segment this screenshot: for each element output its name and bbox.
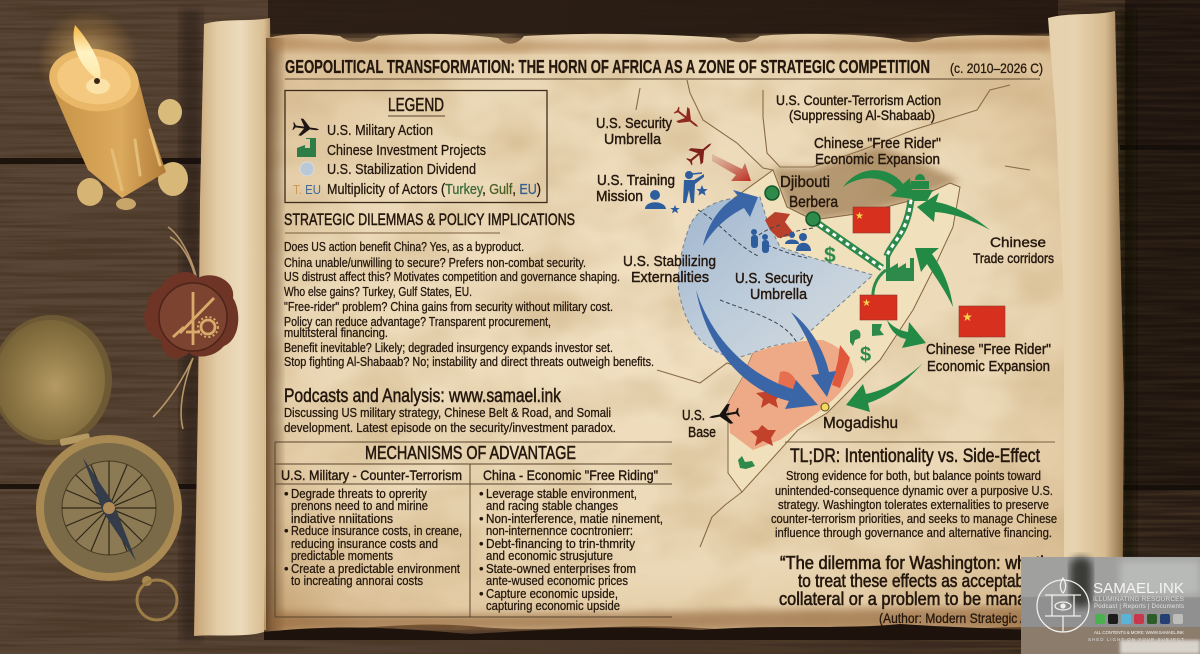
watermark slogan: SHED LIGHT ON YOUR SUBJECT [1088, 637, 1184, 642]
column: China [479, 467, 663, 613]
text block: podcasts: Podcasts and Analysis: www.samael.ink [284, 386, 561, 407]
arrow: green to port [843, 170, 913, 199]
map labels: Externalities [631, 269, 709, 286]
watermark platform icons [1095, 614, 1183, 624]
watermark logo [1037, 578, 1089, 632]
icon: flag of China [853, 207, 890, 233]
icon: port Berbera [806, 212, 820, 226]
icon: flag of China: ★ [855, 211, 864, 222]
column: U.S. military: Degrade threats to oprerity [291, 486, 427, 501]
map labels: U.S. Training [597, 172, 675, 189]
map labels: Economic Expansion [927, 358, 1050, 375]
map: surrounding coastlines [636, 80, 1030, 547]
heading: strategic dilemmas: STRATEGIC DILEMMAS & POLICY IMPLICATIONS [284, 210, 575, 229]
main parchment sheet [264, 34, 1070, 640]
icon: flag of China: ★ [962, 310, 973, 324]
column: China: Capture economic upside, [486, 586, 618, 601]
column: U.S. military: Create a predictable environment [291, 561, 460, 576]
text block: TL;DR [771, 442, 1057, 540]
arrow: blue to Mogadishu [696, 290, 818, 409]
column: China: Debt-financing to trin-thmrity [486, 536, 635, 551]
map labels [596, 92, 1054, 441]
map: southern conflict zone [728, 340, 853, 450]
legend label: Multiplicity of Actors (Turkey, Gulf, EU) [327, 181, 541, 198]
map: conflict markers [750, 212, 850, 446]
watermark tagline: ILLUMINATING RESOURCES [1093, 596, 1185, 603]
icon: training soldier [645, 171, 708, 213]
map labels: (Suppressing Al-Shabaab) [789, 107, 935, 123]
watermark wordmark: SAMAEL.INK [1093, 581, 1184, 597]
map labels: Chinese "Free Rider" [926, 341, 1051, 358]
column: China: • [479, 561, 484, 576]
icon: stabilization circle [300, 162, 314, 176]
icon: factory [886, 255, 914, 281]
icon: flag of China: ★ [862, 298, 871, 309]
column: China: • [479, 586, 484, 601]
text block: dilemmas list: US distrust affect this? Motivates competition and governance shaping. [284, 270, 620, 284]
panel: mechanisms of advantage table [275, 442, 672, 617]
icon: Mogadishu marker [821, 403, 829, 411]
quote: collateral or a problem to be managed” [779, 589, 1059, 609]
map labels: Berbera [789, 194, 838, 211]
map: Horn of Africa [636, 80, 1030, 547]
map labels: Umbrella [604, 131, 662, 148]
table heading: MECHANISMS OF ADVANTAGE [365, 443, 576, 463]
icon: actors initials: T. EU [293, 182, 321, 197]
column: China: non-internennce cocntronierr: [486, 523, 633, 538]
column: U.S. military: • [284, 523, 289, 538]
icon: candle [38, 10, 188, 210]
text block: dilemmas list: Does US action benefit China? Yes, as a byproduct. [284, 240, 524, 254]
map labels: U.S. Security [735, 270, 813, 287]
legend label: Chinese Investment Projects [327, 142, 486, 159]
quote: “The dilemma for Washington: whether [780, 553, 1064, 573]
map labels: Djibouti [780, 174, 830, 191]
text block: podcasts: Discussing US military strategy, Chinese Belt & Road, and Somali [284, 405, 611, 420]
map: dashed movement arrows [698, 210, 813, 343]
column: U.S. military: • [284, 486, 289, 501]
right scroll roll [1048, 11, 1124, 654]
legend heading: LEGEND [388, 95, 444, 115]
column: U.S. military: predictable moments [291, 548, 393, 563]
column: U.S. military: prenons need to and mirine [291, 498, 428, 513]
column: China: China - Economic "Free Riding" [483, 467, 658, 483]
quote [779, 553, 1069, 626]
column: U.S. military [281, 467, 462, 588]
column: China: • [479, 511, 484, 526]
text block: dilemmas list: "Free-rider" problem? China gains from security without military cost. [284, 300, 613, 314]
map labels: Chinese [990, 234, 1046, 250]
map: U.S. security umbrella region [678, 197, 873, 358]
map: Somalia landmass [690, 170, 960, 492]
map labels: Umbrella [750, 286, 808, 303]
column: China: ante-wused economic prices [486, 573, 628, 588]
icon: wax seal with twine [144, 227, 238, 429]
text block: dilemmas list: China unable/unwilling to secure? Prefers non-combat security. [284, 256, 586, 270]
map labels: U.S. Security [596, 115, 672, 132]
icon: dollar: $ [824, 244, 836, 267]
arrow: green from flag [915, 248, 953, 307]
legend label: U.S. Military Action [327, 122, 433, 139]
text block: dilemmas list: Policy can reduce advantage? Transparent procurement, [284, 315, 551, 329]
map labels: U.S. Counter-Terrorism Action [776, 92, 941, 108]
column: China: State-owned enterprises from [486, 561, 636, 576]
left scroll roll [194, 18, 272, 636]
map labels: Mission [596, 188, 643, 205]
text block: TL;DR: strategy. Washington tolerates externalities to preserve [778, 497, 1049, 512]
text block: TL;DR: counter-terrorism priorities, and seeks to manage Chinese [771, 511, 1057, 526]
column: China: Leverage stable environment, [486, 486, 637, 501]
icon: factory [297, 138, 316, 157]
icon: blue people [751, 229, 811, 253]
map labels: U.S. [682, 407, 705, 424]
text block: podcasts [284, 386, 616, 435]
column: China: and racing stable changes [486, 498, 618, 513]
column: U.S. military: • [284, 561, 289, 576]
column: China: • [479, 536, 484, 551]
text block: podcasts: development. Latest episode on the security/investment paradox. [284, 420, 616, 435]
arrow: blue from umbrella to Mogadishu [791, 312, 836, 397]
watermark services: Podcast | Reports | Documents [1094, 604, 1184, 610]
icon: jet [292, 118, 320, 138]
arrow: blue to Djibouti [703, 190, 758, 246]
map labels: Trade corridors [973, 250, 1054, 266]
column: China: capturing economic upside [486, 598, 620, 613]
panel: legend [285, 90, 547, 202]
map labels: Chinese "Free Rider" [814, 135, 941, 152]
map: gulf shading [773, 146, 960, 222]
icon: red jet [683, 136, 718, 169]
map labels: Mogadishu [823, 415, 898, 432]
icon: flag of China [860, 295, 897, 320]
icon: red jet [671, 103, 704, 134]
column: U.S. military: U.S. Military - Counter-Terrorism [281, 467, 462, 483]
text block: dilemmas list: Stop fighting Al-Shabaab? No; instability and direct threats outweigh benefits. [284, 355, 654, 369]
icon: open compass lid [0, 315, 112, 446]
title: GEOPOLITICAL TRANSFORMATION: THE HORN OF AFRICA AS A ZONE OF STRATEGIC COMPETITION [285, 57, 930, 77]
arrow: green to Mogadishu [846, 363, 923, 412]
column: China: Non-interference, matie ninement, [486, 511, 663, 526]
column: China: and economic strusjuture [486, 548, 613, 563]
icon: green investment blobs [738, 324, 884, 469]
arrow: green trade corridor [917, 193, 990, 230]
text block: TL;DR: influence through governance and alternative financing. [775, 525, 1052, 540]
arrow: red strike [712, 154, 751, 181]
watermark panel: SAMAEL.INK [1021, 557, 1200, 654]
title: (c. 2010–2026 C) [950, 60, 1043, 76]
icon: port Djibouti [765, 186, 779, 200]
text block: TL;DR: TL;DR: Intentionality vs. Side-Effect [790, 446, 1041, 467]
text block: TL;DR: Strong evidence for both, but balance points toward [786, 468, 1041, 483]
icon: compass [36, 435, 182, 620]
quote: to treat these effects as acceptable [798, 571, 1036, 591]
map labels: Economic Expansion [815, 151, 940, 168]
legend label: U.S. Stabilization Dividend [327, 161, 476, 178]
column: U.S. military: reducing insurance costs and [291, 536, 438, 551]
icon: flag of China [959, 306, 1005, 337]
icon: ship [907, 174, 933, 201]
watermark footer: ALL CONTENTS & MORE: WWW.SAMAEL.INK [1094, 630, 1184, 635]
quote: (Author: Modern Strategic Analysis) [879, 610, 1069, 626]
icon: U.S. base jet [707, 402, 741, 427]
map labels: Base [688, 424, 716, 441]
map labels: U.S. Stabilizing [623, 253, 716, 270]
text block: TL;DR: unintended-consequence dynamic over a purposive U.S. [775, 483, 1053, 498]
column: U.S. military: Reduce insurance costs, in creane, [291, 523, 462, 538]
text block: dilemmas list: Who else gains? Turkey, Gulf States, EU. [284, 285, 472, 299]
icon: dollar: $ [860, 344, 871, 366]
text block: dilemmas list: Benefit inevitable? Likely; degraded insurgency expands investor set. [284, 341, 613, 355]
text block: dilemmas list: multitsteral financing. [284, 326, 388, 340]
map: Chinese corridors [813, 200, 911, 300]
text block: dilemmas list [284, 240, 654, 369]
arrow: green expansion [887, 320, 926, 348]
column: U.S. military: indiative nniitations [291, 511, 393, 526]
column: China: • [479, 486, 484, 501]
column: U.S. military: to increating annorai costs [291, 573, 423, 588]
